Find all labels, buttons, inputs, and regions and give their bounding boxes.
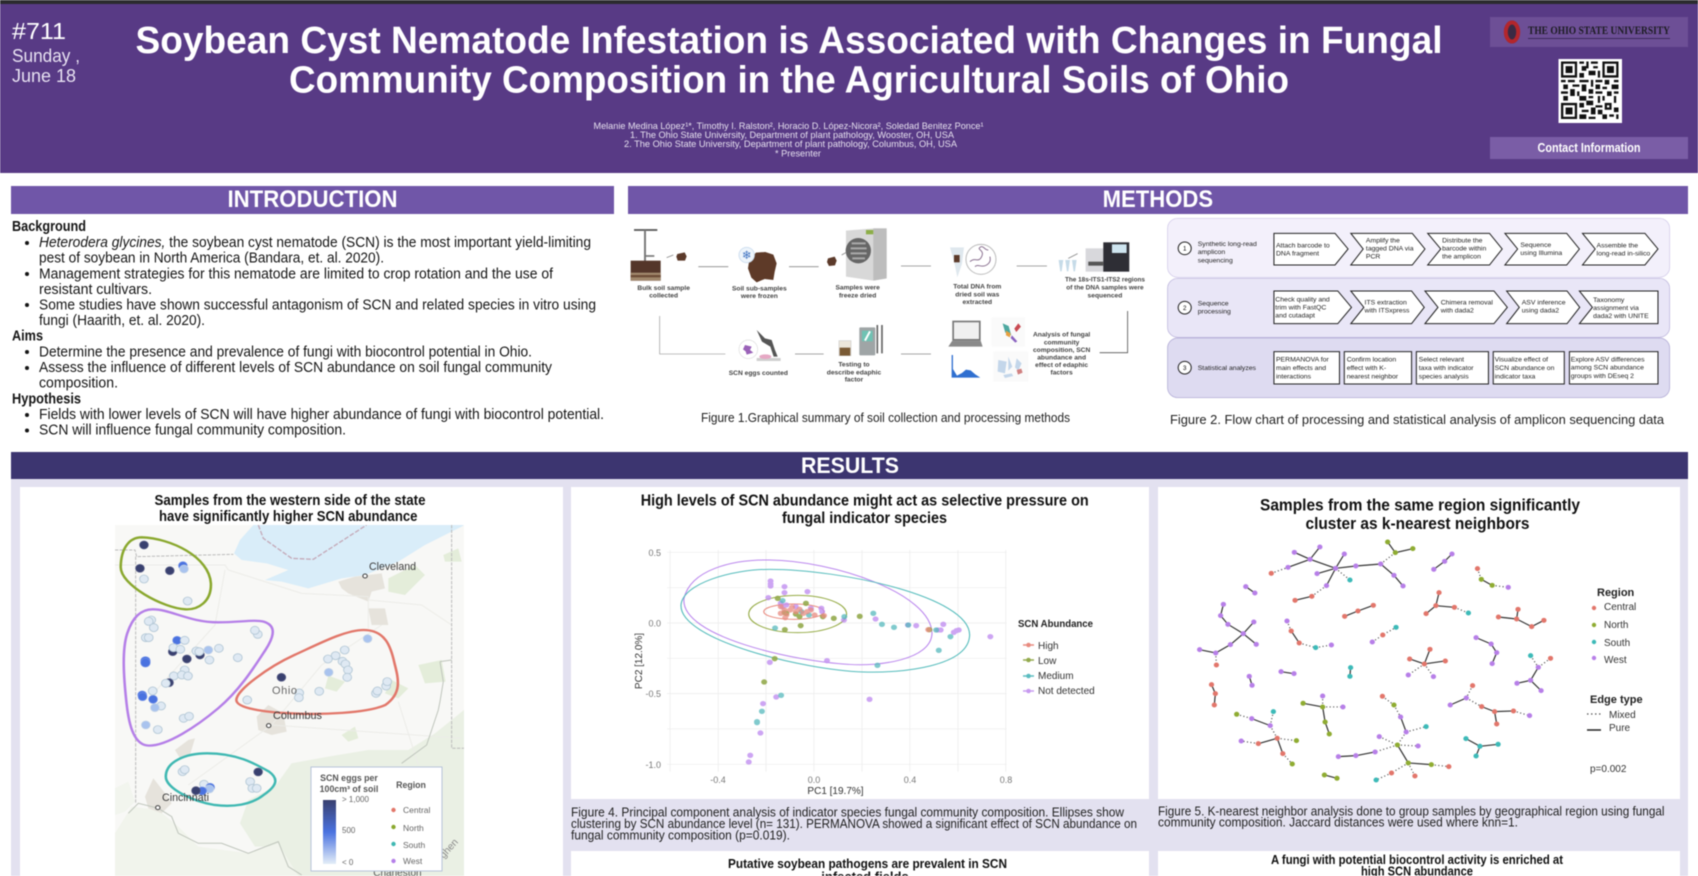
university logo: [1490, 17, 1688, 47]
row 1: sequencing: [1168, 218, 1670, 277]
icon: QR code: [1558, 59, 1622, 123]
figure 4 caption: [571, 805, 1137, 842]
network legend: South: [1604, 638, 1630, 649]
icon: pH meter and beaker: [839, 325, 882, 356]
authors and affiliations: * Presenter: [775, 148, 821, 158]
network legend: Pure: [1609, 723, 1631, 734]
row 2: processing: Taxonomy: [1593, 297, 1625, 304]
figure 1 labels: [637, 277, 1145, 384]
forest shading: [240, 710, 464, 876]
icon: laptop and plots: [948, 317, 1028, 382]
panel: putative soybean pathogens: Putative soybean pathogens are prevalent in SCN: [728, 856, 1007, 871]
results background: [11, 479, 1688, 876]
results heading: [11, 452, 1688, 479]
figure 1 caption: Figure 1.Graphical summary of soil collection and processing methods: [701, 410, 1070, 425]
row 3: statistics: indicator taxa: [1495, 373, 1536, 380]
PCA axes labels: -1.0: [645, 760, 661, 770]
PCA title: fungal indicator species: [782, 510, 947, 527]
PCA scatter plot: [667, 550, 1007, 772]
panel: k-nearest neighbor network: [1158, 487, 1680, 799]
PCA legend: Low: [1038, 656, 1057, 667]
network legend: [1587, 587, 1643, 775]
row 3: statistics: main effects and: [1276, 365, 1326, 372]
Lake Erie: [234, 525, 464, 588]
row 1: sequencing: Assemble the: [1597, 243, 1638, 250]
row 3: statistics: 3: [1183, 365, 1187, 372]
poster number and date: June 18: [12, 66, 76, 86]
map legend: < 0: [342, 858, 354, 867]
roads: [115, 565, 462, 785]
row 2: processing: Sequence: [1198, 301, 1229, 308]
row 1: sequencing: sequencing: [1198, 257, 1233, 264]
network title: cluster as k-nearest neighbors: [1306, 514, 1530, 533]
figure 1 labels: dried soil was: [955, 291, 1000, 298]
figure 1 labels: Soil sub-samples: [732, 285, 787, 292]
panel: PCA of fungal indicator species: [571, 487, 1149, 799]
row 1: sequencing: DNA fragment: [1276, 250, 1319, 257]
figure 1 labels: Total DNA from: [953, 284, 1001, 291]
map legend: South: [403, 840, 425, 850]
figure 1 labels: were frozen: [740, 293, 778, 300]
city labels: eghen: [434, 837, 461, 865]
PCA axes labels: PC1 [19.7%]: [807, 786, 864, 797]
map legend: SCN eggs per: [320, 773, 378, 783]
authors and affiliations: 2. The Ohio State University, Department of plant pathology, Columbus, OH, USA: [624, 139, 958, 149]
introduction body text: SCN will influence fungal community composition.: [39, 423, 346, 439]
row 2: processing: with ITSxpress: [1364, 307, 1410, 314]
region loops: [121, 537, 398, 806]
PCA legend: Not detected: [1038, 686, 1095, 697]
PCA legend: Medium: [1038, 671, 1074, 682]
row 1: sequencing: tagged DNA via: [1366, 246, 1414, 253]
row 3: statistics: [1168, 338, 1670, 398]
row 2: processing: trim with FastQC: [1275, 304, 1326, 311]
network legend: North: [1604, 620, 1628, 631]
icon: sequencer: [1059, 242, 1129, 272]
map title: have significantly higher SCN abundance: [159, 508, 418, 525]
urban areas: [145, 573, 388, 813]
university logo: THE OHIO STATE UNIVERSITY: [1528, 25, 1671, 37]
PCA axes labels: 0.4: [904, 775, 916, 785]
figure 4 caption: clustering by SCN abundance level (n= 131). PERMANOVA showed a significant effect of SCN abundance on: [571, 816, 1137, 831]
row 2: processing: [1168, 278, 1670, 337]
row 2: processing: ASV inference: [1522, 299, 1566, 306]
row 1: sequencing: Sequence: [1520, 242, 1551, 249]
city labels: Cleveland: [369, 561, 416, 573]
figure 1 labels: composition, SCN: [1033, 347, 1090, 354]
network graph: [1200, 542, 1551, 780]
introduction body text: [12, 219, 604, 439]
header banner: [0, 0, 1698, 173]
figure 1 labels: of the DNA samples were: [1066, 284, 1144, 291]
title: [136, 20, 1442, 102]
figure 1 labels: SCN eggs counted: [729, 370, 788, 377]
figure 1 labels: describe edaphic: [827, 369, 881, 376]
map legend: Central: [403, 805, 431, 815]
city labels: Ohio: [272, 685, 297, 697]
poster number and date: #711: [12, 18, 66, 44]
row 1: sequencing: Synthetic long-read: [1198, 241, 1257, 248]
methods heading: METHODS: [1103, 186, 1213, 213]
row 3: statistics: Explore ASV differences: [1571, 356, 1645, 363]
map legend: 500: [342, 826, 356, 835]
PCA legend: SCN Abundance: [1018, 619, 1093, 630]
introduction body text: resistant cultivars.: [39, 282, 152, 298]
figure 4 caption: Figure 4. Principal component analysis of indicator species fungal community composition. Ellipses show: [571, 805, 1125, 820]
row 2: processing: and cutadapt: [1275, 312, 1315, 319]
icon: frozen soil: ❄: [742, 250, 751, 262]
PCA title: [641, 493, 1089, 527]
PCA axes labels: PC2 [12.0%]: [634, 633, 645, 689]
introduction body text: Determine the presence and prevalence of fungi with biocontrol potential in Ohio.: [39, 344, 532, 360]
introduction body text: pest of soybean in North America (Bandara, et. al. 2020).: [39, 251, 384, 267]
introduction body text: Management strategies for this nematode are limited to crop rotation and the use of: [39, 266, 554, 282]
PCA axes labels: 0.0: [808, 775, 820, 785]
introduction body text: Heterodera glycines, the soybean cyst nematode (SCN) is the most important yield-limiting: [39, 235, 591, 251]
panel: SCN map: [20, 487, 563, 876]
figure 1 labels: extracted: [962, 299, 992, 306]
state borders: [115, 525, 464, 803]
PCA axes labels: 0.5: [648, 548, 661, 558]
row 1: sequencing: long-read in-silico: [1597, 251, 1650, 258]
figure 5 caption: [1158, 804, 1665, 830]
figure 2: flow chart: [1168, 218, 1670, 398]
city markers: [156, 574, 367, 810]
row 2: processing: processing: [1198, 309, 1231, 316]
introduction body text: Hypothesis: [12, 391, 81, 407]
figure 1 labels: Analysis of fungal: [1033, 331, 1090, 338]
contact information button: Contact Information: [1538, 141, 1640, 155]
map legend: [311, 767, 442, 871]
introduction heading: INTRODUCTION: [228, 186, 398, 213]
city labels: Columbus: [273, 710, 322, 722]
introduction body text: Fields with lower levels of SCN will have higher abundance of fungi with biocontrol potential.: [39, 407, 604, 423]
row 3: statistics: Visualize effect of: [1495, 356, 1548, 363]
row 3: statistics: Select relevant: [1419, 356, 1464, 363]
network title: [1260, 496, 1580, 533]
methods heading: [628, 186, 1688, 214]
figure 2 caption: Figure 2. Flow chart of processing and statistical analysis of amplicon sequencing data: [1170, 412, 1665, 427]
results heading: RESULTS: [801, 453, 899, 478]
row 2: processing: ITS extraction: [1365, 299, 1407, 306]
PCA axes labels: -0.5: [645, 689, 661, 699]
row 2: processing: dada2 with UNITE: [1593, 313, 1649, 320]
poster number and date: [12, 18, 80, 86]
row 1: sequencing: using Illumina: [1520, 250, 1562, 257]
row 3: statistics: Confirm location: [1347, 356, 1396, 363]
row 2: processing: using dada2: [1522, 307, 1559, 314]
row 1: sequencing: the amplicon: [1442, 254, 1481, 261]
figure 1 labels: collected: [649, 292, 678, 299]
network legend: Mixed: [1609, 710, 1636, 721]
PCA axes labels: -0.4: [710, 775, 726, 785]
title: Community Composition in the Agricultural Soils of Ohio: [289, 60, 1289, 102]
network legend: Region: [1597, 587, 1635, 599]
figure 1 labels: factors: [1051, 370, 1073, 377]
row 2: processing: assignment via: [1593, 305, 1639, 312]
row 1: sequencing: Distribute the: [1442, 238, 1483, 245]
city labels: [162, 561, 461, 865]
city labels: Cincinnati: [162, 792, 209, 804]
network legend: West: [1604, 655, 1627, 666]
map legend: North: [403, 823, 424, 833]
map legend: Region: [396, 780, 426, 790]
icon: frozen soil: [739, 247, 777, 282]
map legend: West: [403, 856, 423, 866]
arrows: [660, 252, 1128, 354]
authors and affiliations: [594, 121, 984, 158]
introduction body text: Aims: [12, 329, 43, 345]
icon: microscope: [739, 330, 781, 361]
introduction body text: Assess the influence of different levels of SCN abundance on soil fungal community: [39, 360, 553, 376]
poster number and date: Sunday ,: [12, 46, 80, 66]
title: Soybean Cyst Nematode Infestation is Associated with Changes in Fungal: [136, 20, 1442, 62]
map title: [154, 492, 426, 525]
PCA legend: [1018, 619, 1095, 697]
network legend: Central: [1604, 602, 1636, 613]
PCA axes labels: [634, 548, 1012, 797]
introduction body text: Background: [12, 219, 86, 235]
authors and affiliations: 1. The Ohio State University, Department of plant pathology, Wooster, OH, USA: [630, 130, 955, 140]
figure 1 labels: Testing to: [838, 362, 870, 369]
figure 1 labels: sequenced: [1088, 292, 1122, 299]
PCA axes labels: 0.0: [648, 618, 661, 628]
panel: biocontrol fungi: A fungi with potential biocontrol activity is enriched at: [1271, 852, 1564, 867]
figure 1 labels: community: [1044, 339, 1080, 346]
figure 1 labels: effect of edaphic: [1035, 362, 1088, 369]
panel: biocontrol fungi: [1158, 851, 1680, 876]
map title: Samples from the western side of the state: [154, 492, 426, 509]
region loops and sample points: [121, 537, 398, 810]
map base layer: [115, 525, 464, 876]
PCA title: High levels of SCN abundance might act as selective pressure on: [641, 493, 1089, 510]
row 1: sequencing: PCR: [1366, 254, 1381, 261]
figure 4 caption: fungal community composition (p=0.019).: [571, 827, 790, 842]
introduction panel: [11, 186, 614, 439]
row 3: statistics: among SCN abundance: [1571, 365, 1644, 372]
row 2: processing: with dada2: [1440, 307, 1474, 314]
icon: soil corer: [631, 230, 687, 281]
contact information button: [1490, 137, 1688, 159]
row 2: processing: Chimera removal: [1441, 299, 1493, 306]
network title: Samples from the same region significantly: [1260, 496, 1580, 515]
map legend: 100cm³ of soil: [320, 784, 378, 794]
row 3: statistics: taxa with indicator: [1419, 365, 1474, 372]
introduction body text: Some studies have shown successful antagonism of SCN and related species in vitro using: [39, 298, 596, 314]
row 3: statistics: PERMANOVA for: [1276, 356, 1330, 363]
row 3: statistics: SCN abundance on: [1495, 365, 1555, 372]
introduction heading: [11, 186, 614, 214]
figure 1 labels: Bulk soil sample: [637, 285, 690, 292]
row 1: sequencing: barcode within: [1442, 246, 1487, 253]
row 1: sequencing: 1: [1183, 246, 1187, 253]
figure 1 labels: Samples were: [835, 284, 880, 291]
row 2: processing: Check quality and: [1275, 296, 1330, 303]
row 3: statistics: effect with K-: [1347, 365, 1386, 372]
row 3: statistics: interactions: [1276, 373, 1312, 380]
figure 1 labels: freeze dried: [839, 292, 876, 299]
row 1: sequencing: amplicon: [1198, 249, 1225, 256]
introduction body text: composition.: [39, 376, 118, 392]
network legend: Edge type: [1590, 694, 1643, 706]
row 2: processing: 2: [1183, 305, 1187, 312]
row 1: sequencing: Attach barcode to: [1276, 242, 1330, 249]
authors and affiliations: Melanie Medina López¹*, Timothy I. Ralston², Horacio D. López-Nicora², Soledad Benitez Ponce¹: [594, 121, 984, 131]
row 1: sequencing: Amplify the: [1366, 238, 1400, 245]
icon: freeze dryer: [827, 228, 887, 281]
figure 1: graphical summary: [631, 228, 1145, 384]
sample points: [136, 541, 392, 795]
panel: putative soybean pathogens: [571, 851, 1149, 876]
figure 5 caption: community composition. Jaccard distances were used where knn=1.: [1158, 815, 1518, 830]
row 3: statistics: groups with DEseq 2: [1571, 373, 1634, 380]
introduction body text: fungi (Haarith, et. al. 2020).: [39, 313, 205, 329]
row 3: statistics: Statistical analyzes: [1198, 365, 1257, 372]
network legend: p=0.002: [1590, 764, 1627, 775]
map legend: > 1,000: [342, 795, 369, 804]
icon: DNA extraction tube: [950, 244, 996, 277]
figure 1 labels: factor: [845, 377, 864, 384]
PCA legend: High: [1038, 641, 1059, 652]
row 3: statistics: nearest neighbor: [1347, 373, 1399, 380]
figure 1 labels: The 18s-ITS1-ITS2 regions: [1065, 277, 1145, 284]
row 3: statistics: species analysis: [1419, 373, 1469, 380]
figure 1 labels: abundance and: [1037, 354, 1086, 361]
PCA axes labels: 0.8: [1000, 775, 1012, 785]
